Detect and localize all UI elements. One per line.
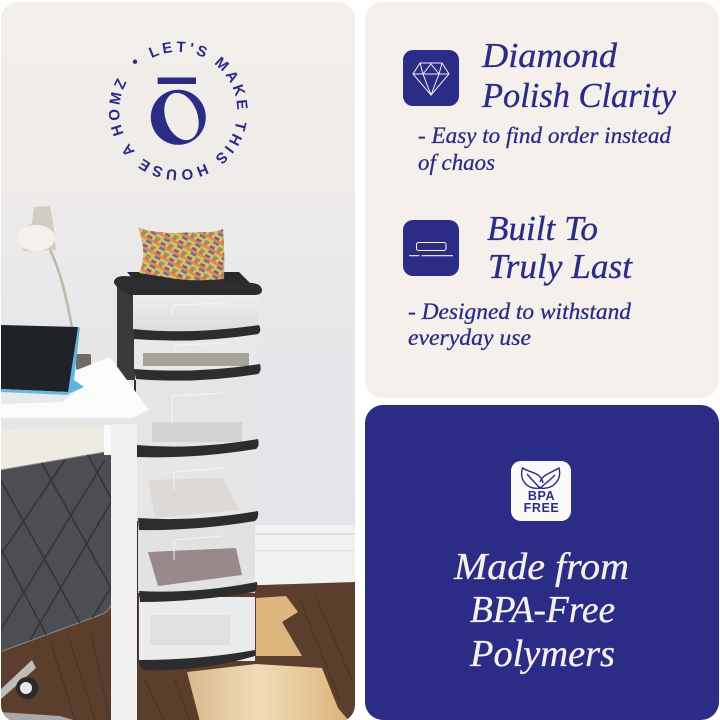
logo o bbox=[151, 88, 206, 145]
white desk bbox=[0, 357, 149, 720]
drawer 1 bbox=[133, 294, 258, 331]
icon: diamond bbox=[403, 50, 459, 106]
heading: made from bpa-free polymers bbox=[453, 546, 629, 675]
storage drawer tower bbox=[114, 272, 262, 670]
heading: built to truly last: Truly Last bbox=[488, 247, 633, 286]
office chair bbox=[1, 452, 111, 720]
icon: bpa free badge: FREE bbox=[524, 501, 559, 515]
drawer 6 bbox=[139, 597, 255, 661]
drawer 5 bbox=[138, 523, 255, 593]
heading: built to truly last bbox=[487, 209, 633, 286]
text: designed to withstand: everyday use bbox=[408, 325, 531, 351]
icon: bpa free badge bbox=[511, 461, 571, 521]
heading: made from bpa-free polymers: BPA-Free bbox=[470, 589, 615, 631]
floor bbox=[0, 582, 356, 720]
heading: diamond polish clarity bbox=[481, 36, 676, 115]
heading: made from bpa-free polymers: Polymers bbox=[469, 633, 615, 675]
baseboard bbox=[255, 525, 355, 585]
drawer 4 bbox=[137, 457, 240, 521]
wall bbox=[1, 2, 355, 525]
panel: lifestyle photo bbox=[0, 0, 356, 720]
heading: diamond polish clarity: Diamond bbox=[481, 36, 618, 75]
text: easy to find order bbox=[418, 123, 671, 176]
logo: circular slogan badge bbox=[108, 42, 248, 180]
text: easy to find order: - Easy to find order instead bbox=[418, 123, 671, 149]
patterned zip pouch bbox=[138, 227, 224, 280]
text: designed to withstand bbox=[408, 299, 631, 351]
slogan ring text: LET'S MAKE THIS HOUSE A HOMZ bbox=[108, 42, 248, 180]
heading: made from bpa-free polymers: Made from bbox=[453, 546, 629, 588]
text: designed to withstand: - Designed to withstand bbox=[408, 299, 631, 325]
drawer 2 bbox=[134, 339, 249, 370]
desk drawer front bbox=[1, 428, 104, 469]
panel: bpa free bbox=[365, 405, 719, 720]
icon: bpa free badge: BPA bbox=[528, 489, 555, 503]
text: easy to find order: of chaos bbox=[418, 150, 495, 176]
logo macron bbox=[158, 78, 196, 84]
desk lamp bbox=[17, 206, 91, 370]
heading: built to truly last: Built To bbox=[487, 209, 598, 248]
icon: durable shelf bbox=[403, 220, 459, 276]
panel: features bbox=[365, 2, 719, 398]
heading: diamond polish clarity: Polish Clarity bbox=[481, 76, 676, 115]
ring dot bbox=[133, 60, 137, 64]
drawer 3 bbox=[136, 380, 242, 446]
tablet with blue case bbox=[0, 325, 84, 404]
